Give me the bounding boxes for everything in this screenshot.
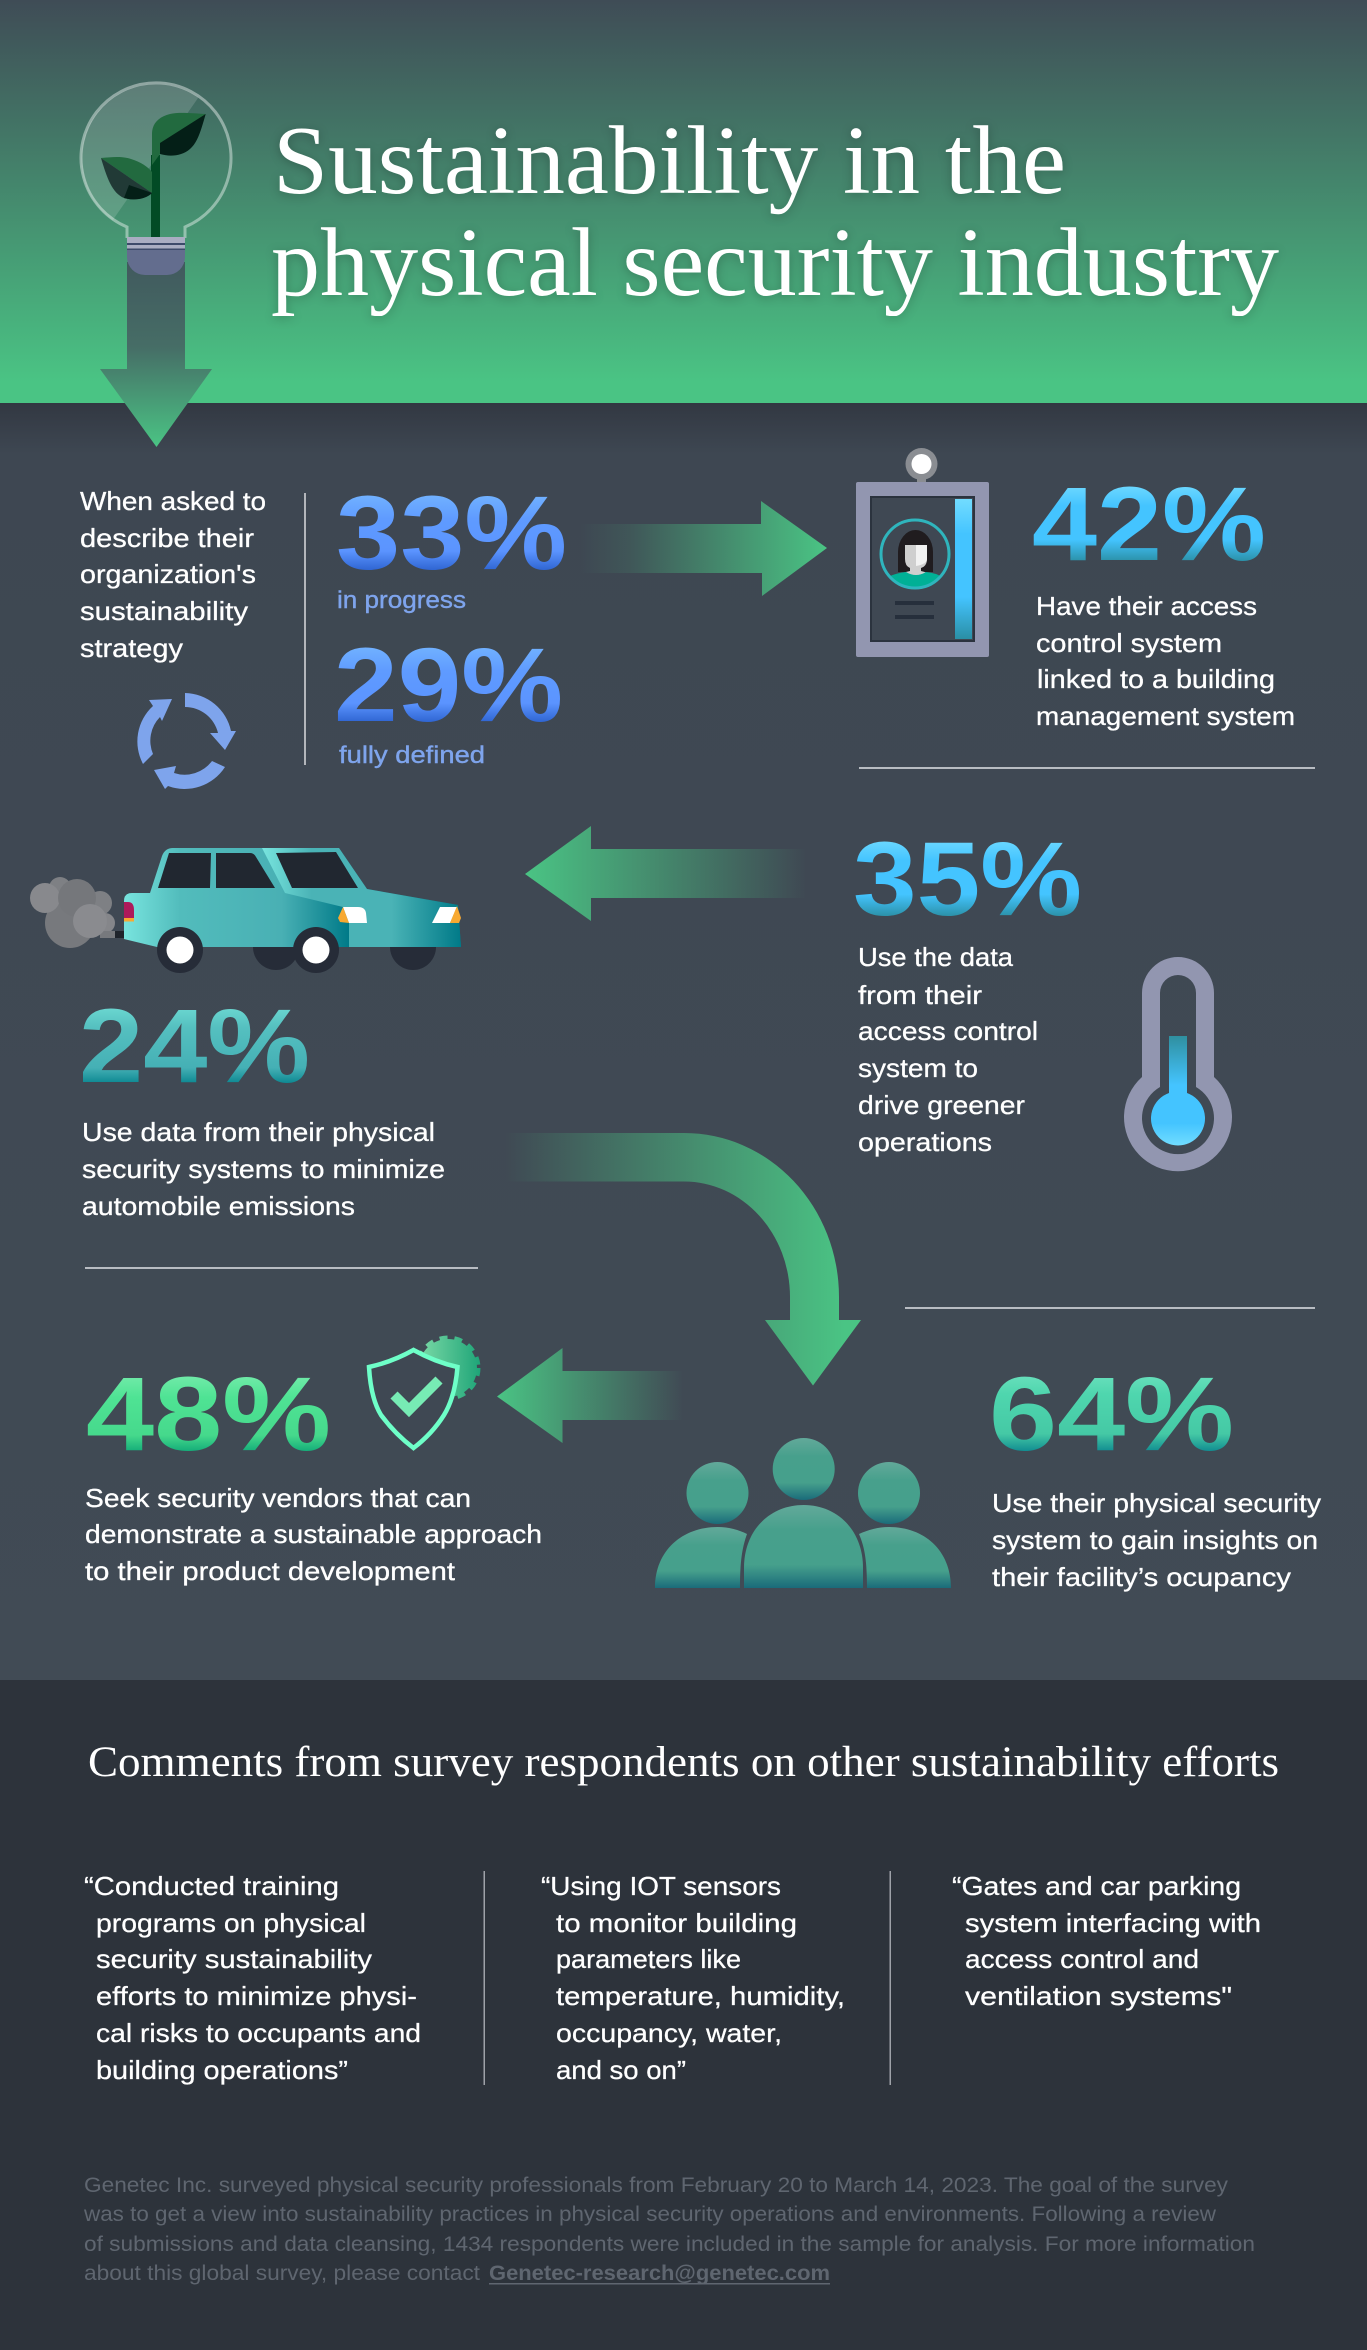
stat: 42% access control: management system: [1036, 701, 1295, 731]
bulb base: [127, 237, 185, 275]
text: strategy question: describe their: [80, 523, 254, 553]
stat: 64% facility occupancy: their facility’s ocupancy: [992, 1562, 1291, 1592]
stat: 35% greener operations: drive greener: [858, 1090, 1025, 1120]
quote: IOT sensors: temperature, humidity,: [556, 1981, 845, 2011]
quote: gates and car parking: access control and: [965, 1944, 1199, 1974]
stat: 33% in progress: 33%: [336, 475, 567, 592]
main body background: [0, 403, 1367, 1680]
quote: IOT sensors: to monitor building: [556, 1908, 797, 1938]
stat: 48% sustainable vendors: Seek security vendors that can: [85, 1483, 471, 1513]
quote: training programs: security sustainability: [96, 1944, 372, 1974]
arrow: left to shield: [497, 1348, 683, 1443]
quote: IOT sensors: parameters like: [556, 1944, 741, 1974]
stat: 29% fully defined: 29%: [334, 627, 563, 744]
text: strategy question: sustainability: [80, 596, 248, 626]
right leaf: [152, 113, 206, 165]
stat: 35% greener operations: operations: [858, 1127, 992, 1157]
stat: 24% automobile emissions: security systems to minimize: [82, 1154, 445, 1184]
text: strategy question: organization's: [80, 559, 256, 589]
quote: training programs: “Conducted training: [84, 1871, 339, 1901]
stat: 35% greener operations: from their: [858, 980, 982, 1010]
icon: light bulb with seedling: [80, 81, 232, 275]
stat: 64% facility occupancy: Use their physical security: [992, 1488, 1321, 1518]
icon: group of people: [655, 1438, 951, 1588]
footer: survey methodology: Genetec-research@genetec.com: [489, 2261, 830, 2285]
quote: gates and car parking: [952, 1871, 1261, 2011]
quote: IOT sensors: “Using IOT sensors: [541, 1871, 781, 1901]
stat: 48% sustainable vendors: demonstrate a sustainable approach: [85, 1519, 542, 1549]
quote: IOT sensors: [541, 1871, 845, 2085]
quote: training programs: programs on physical: [96, 1908, 366, 1938]
footer: survey methodology: about this global survey, please contact: [84, 2261, 480, 2285]
stat: 42% access control: control system: [1036, 628, 1222, 658]
icon: car with exhaust: [30, 848, 461, 973]
title: Sustainability in the: [273, 107, 1066, 214]
stat: 42% access control: linked to a building: [1037, 664, 1275, 694]
stat: 64% facility occupancy: system to gain insights on: [992, 1525, 1318, 1555]
stat: 24% automobile emissions: Use data from their physical: [82, 1117, 435, 1147]
stat: 64% facility occupancy: 64%: [989, 1356, 1234, 1473]
quote: IOT sensors: occupancy, water,: [556, 2018, 782, 2048]
left leaf: [101, 157, 152, 199]
quote: IOT sensors: and so on”: [556, 2055, 686, 2085]
quote: gates and car parking: “Gates and car parking: [952, 1871, 1241, 1901]
quote: training programs: cal risks to occupants and: [96, 2018, 421, 2048]
stat: 48% sustainable vendors: to their product development: [85, 1556, 456, 1586]
portrait: [881, 520, 949, 590]
comments background panel: [0, 1680, 1367, 2350]
stat: 35% greener operations: Use the data: [858, 942, 1014, 972]
stat: 29% fully defined: fully defined: [339, 742, 485, 769]
stat: 48% sustainable vendors: 48%: [86, 1356, 331, 1473]
stat: 42% access control: Have their access: [1036, 591, 1257, 621]
arrow: left to car: [525, 826, 806, 921]
footer: survey methodology: of submissions and data cleansing, 1434 respondents were included in the sample for analysis. For more information: [84, 2232, 1255, 2256]
text: strategy question: strategy: [80, 633, 183, 663]
stat: 35% greener operations: 35%: [853, 821, 1082, 938]
arrow: down from light bulb: [100, 262, 212, 447]
quote: training programs: [84, 1871, 421, 2085]
heading: comments: Comments from survey respondents on other sustainability efforts: [88, 1739, 1279, 1786]
arrow: curved down to people: [505, 1133, 861, 1386]
footer: survey methodology: [83, 2173, 1255, 2285]
title: [271, 107, 1280, 316]
stat: 24% automobile emissions: [79, 988, 445, 1221]
stat: 24% automobile emissions: 24%: [79, 988, 310, 1105]
quote: training programs: building operations”: [96, 2055, 348, 2085]
stat: 42% access control: [1032, 466, 1295, 731]
stat: 33% in progress: in progress: [337, 587, 466, 614]
text: strategy question: When asked to: [80, 486, 266, 516]
quote: training programs: efforts to minimize physi-: [96, 1981, 417, 2011]
stat: 64% facility occupancy: [989, 1356, 1321, 1592]
stat: 48% sustainable vendors: [85, 1356, 542, 1586]
icon: ID badge: [856, 448, 989, 657]
footer: survey methodology: was to get a view into sustainability practices in physical security operations and environments. Following a review: [83, 2202, 1216, 2226]
stat: 35% greener operations: system to: [858, 1053, 978, 1083]
quote: gates and car parking: system interfacing with: [965, 1908, 1261, 1938]
stem: [151, 155, 160, 238]
icon: shield with gear: [369, 1338, 478, 1448]
stat: 35% greener operations: [853, 821, 1082, 1157]
arrow: right to access control: [580, 501, 827, 596]
footer: survey methodology: Genetec Inc. surveyed physical security professionals from February 20 to March 14, 2023. The goal of the survey: [84, 2173, 1228, 2197]
stat: 24% automobile emissions: automobile emissions: [82, 1191, 355, 1221]
quote: gates and car parking: ventilation systems": [965, 1981, 1232, 2011]
stat: 42% access control: 42%: [1032, 466, 1266, 583]
header band: [0, 0, 1367, 403]
exhaust smoke: [30, 877, 124, 948]
title: physical security industry: [271, 209, 1280, 316]
icon: recycle arrows: [137, 693, 236, 789]
icon: thermometer: [1124, 957, 1232, 1171]
stat: 35% greener operations: access control: [858, 1016, 1038, 1046]
text: strategy question: [80, 486, 266, 663]
